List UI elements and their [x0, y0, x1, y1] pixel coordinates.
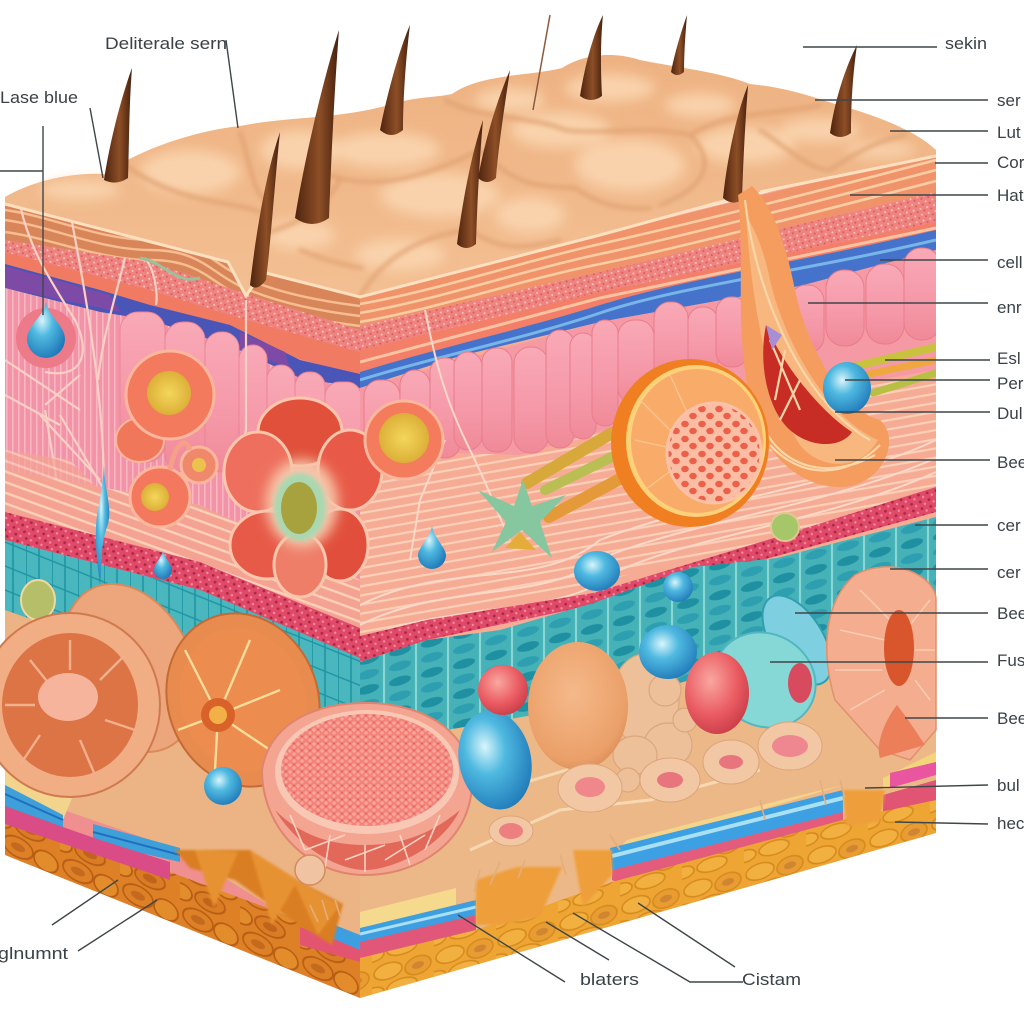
layer: right yellow band — [622, 786, 840, 845]
layer: right salmon band — [360, 222, 936, 374]
icon: centre-right orange stalactites — [476, 790, 885, 925]
layer: left papillae fingers — [120, 312, 360, 472]
icon: green star cell — [478, 480, 566, 558]
icon: teal lens cell — [697, 584, 846, 746]
layer: left pink dermis — [5, 288, 360, 580]
icon: tan muscle bundle back — [37, 562, 223, 774]
label: cer upper: cer — [997, 516, 1021, 535]
layer: centre bands — [360, 888, 456, 930]
labels: right column leader lines — [770, 47, 990, 824]
layer: left salmon band — [5, 252, 360, 376]
label: enr: enr — [997, 298, 1022, 317]
central slot — [884, 610, 914, 686]
panel: left face of skin block — [0, 190, 365, 1010]
layer: right fibre zone — [360, 370, 936, 640]
layer: right wavy epidermis stripes — [360, 152, 936, 326]
layer: left purple blue band — [5, 264, 360, 388]
layer: left blue bands — [5, 785, 63, 828]
labels: bottom leader lines — [458, 903, 743, 982]
layer: right subcutaneous tan — [360, 678, 936, 930]
layer: right blue band — [610, 790, 843, 870]
icon: peach lobes — [611, 654, 697, 792]
layer: right magenta stripe — [890, 762, 936, 788]
layer: left orange fat — [5, 820, 360, 998]
icon: peach egg — [528, 642, 628, 770]
icon: starred orange disc — [142, 592, 344, 808]
tan lumps with pink centres — [489, 722, 822, 846]
panel: top skin surface — [5, 55, 936, 297]
label: Lase blue: Lase blue — [0, 88, 78, 107]
layer: left corner pink band — [300, 927, 360, 962]
label: blaters: blaters — [580, 970, 639, 989]
label: hec: hec — [997, 814, 1024, 833]
layer: right papillae fingers — [364, 248, 940, 470]
icon: red flower gland — [224, 398, 382, 597]
label: cer lower: cer — [997, 563, 1021, 582]
labels: left leader lines — [0, 40, 238, 951]
icon: blue follicle bulb — [823, 362, 871, 414]
layer: left wavy epidermis stripes — [5, 200, 360, 330]
layer: left subcutaneous tan — [5, 610, 360, 945]
layer: yellow-green stripes — [527, 347, 936, 517]
icon: orange disc gland — [611, 359, 769, 527]
label: Lut: Lut — [997, 123, 1021, 142]
label: Esl: Esl — [997, 349, 1021, 368]
label: Dul: Dul — [997, 404, 1023, 423]
icon: red bowl gland — [262, 703, 472, 875]
icon: left muscle bundle — [0, 613, 160, 797]
layer: right pink dermis — [360, 250, 936, 455]
label: Hat: Hat — [997, 186, 1024, 205]
layer: right blue band — [360, 230, 936, 388]
tan fringe along fat edge — [310, 780, 845, 922]
icon: small tan nodule — [295, 855, 325, 885]
icon: blue ball left — [204, 767, 242, 805]
icon: red ball — [478, 665, 528, 715]
icon: upper orange gland — [116, 351, 214, 462]
icon: dermal balls — [21, 513, 799, 620]
label: Cistam: Cistam — [742, 970, 801, 989]
panel: right face of skin block — [355, 140, 945, 1010]
layer: left yellow band — [5, 770, 72, 820]
layer: right dotted pink band — [360, 192, 936, 350]
icon: hair shafts — [104, 15, 857, 288]
layer: left red band — [5, 512, 360, 660]
icon: left orange stalactites — [175, 850, 343, 945]
skin bumps — [40, 74, 915, 271]
label: Cor: Cor — [997, 153, 1024, 172]
layer: left dotted pink band — [5, 240, 360, 352]
icon: ring gland — [365, 401, 443, 479]
layer: right orange fat — [360, 800, 936, 998]
icon: red oval ball — [685, 652, 749, 734]
layer: left teal band — [5, 540, 360, 708]
label: Per: Per — [997, 374, 1024, 393]
label: cell: cell — [997, 253, 1023, 272]
icon: peach follicle disc — [827, 567, 936, 760]
label: bul: bul — [997, 776, 1020, 795]
layer: left lower fibre zone — [5, 470, 360, 640]
layer: pale fibre lines — [360, 310, 936, 640]
skin seams — [125, 100, 905, 297]
spongy core — [667, 403, 761, 503]
layer: droplet halo — [16, 308, 76, 368]
label: sekin: sekin — [945, 34, 987, 53]
layer: right red band — [360, 487, 936, 662]
icon: lower orange gland — [130, 443, 217, 527]
label: Deliterale sern: Deliterale sern — [105, 34, 227, 53]
icon: teal sweat droplets — [27, 300, 446, 585]
layer: left dermal fibres — [5, 205, 246, 560]
panel: hair follicle — [738, 186, 889, 487]
icon: blue ball right — [639, 625, 697, 679]
layer: left pink band — [5, 806, 170, 880]
layer: right teal band — [360, 517, 936, 730]
label: ser: ser — [997, 91, 1021, 110]
icon: blue egg — [449, 704, 541, 816]
skin rim highlight — [5, 156, 936, 297]
layer: right pink bands — [883, 780, 936, 812]
